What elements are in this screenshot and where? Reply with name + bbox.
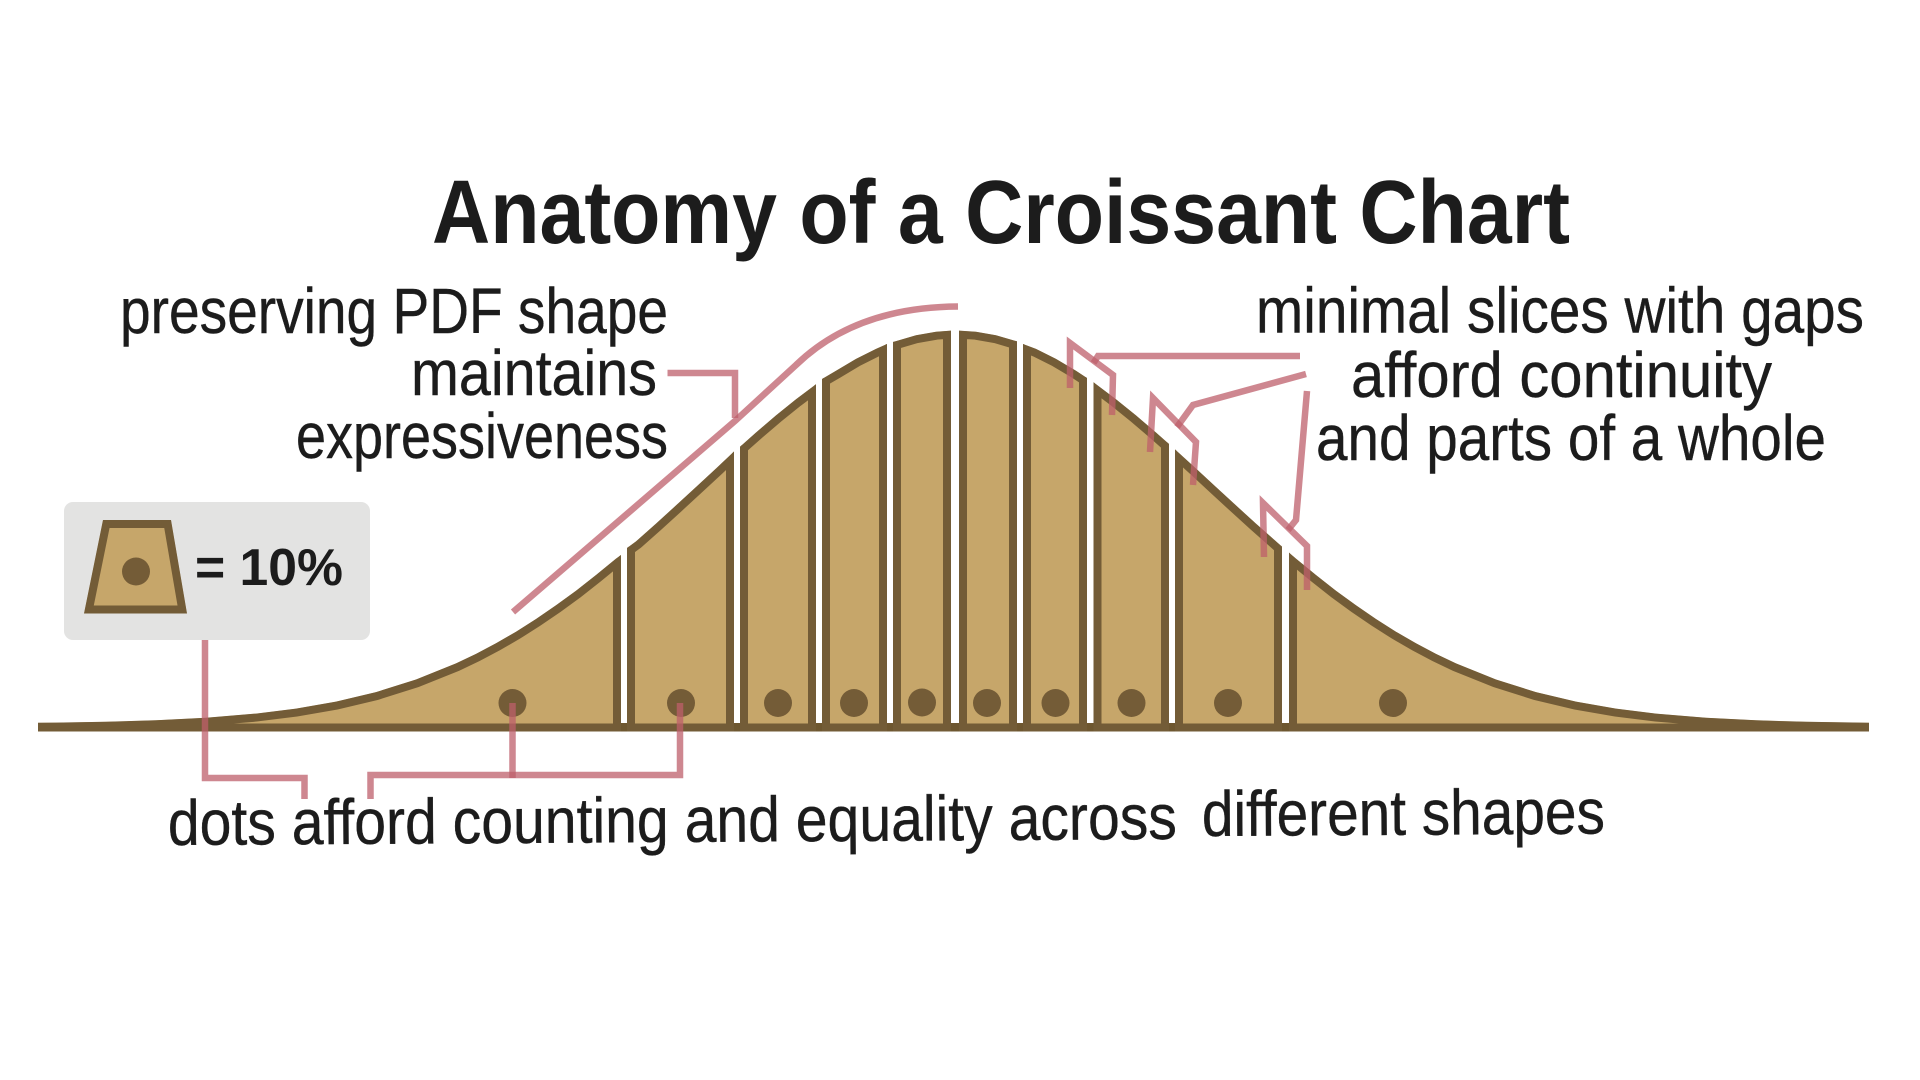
slice 1 bbox=[38, 555, 621, 732]
slice 9 bbox=[1175, 449, 1282, 732]
annotation text: dots afford counting: dots afford counting and equality across bbox=[168, 781, 1177, 859]
slice 6 bbox=[959, 331, 1017, 732]
legend value: = 10% bbox=[195, 539, 343, 597]
annotation text: preserving PDF shape bbox=[120, 275, 668, 472]
callout: gap bracket 2 bbox=[1150, 374, 1306, 485]
slice 2 bbox=[627, 452, 734, 732]
annotation text: minimal slices with gaps: and parts of a whole bbox=[1316, 402, 1826, 474]
annotation text: preserving PDF shape: maintains bbox=[411, 337, 657, 409]
croissant chart bbox=[38, 331, 1869, 732]
annotation text: minimal slices with gaps bbox=[1256, 274, 1864, 474]
annotation text: preserving PDF shape: preserving PDF shape bbox=[120, 275, 668, 347]
slice 3 bbox=[740, 384, 816, 732]
baseline bbox=[38, 723, 1869, 732]
slice 5 bbox=[893, 331, 951, 732]
slice 7 bbox=[1023, 344, 1087, 732]
legend icon: trapezoid slice with dot bbox=[84, 520, 187, 614]
legend panel bbox=[64, 502, 370, 640]
annotation text: dots afford counting: different shapes bbox=[1202, 776, 1605, 850]
callout: gap bracket 1 bbox=[1070, 343, 1300, 415]
annotation text: preserving PDF shape: expressiveness bbox=[296, 400, 668, 472]
annotation text: minimal slices with gaps: afford continuity bbox=[1351, 339, 1772, 411]
slice 4 bbox=[822, 344, 887, 732]
title: Anatomy of a Croissant Chart bbox=[432, 163, 1570, 263]
slice 8 bbox=[1094, 382, 1169, 732]
legend bbox=[64, 502, 370, 640]
callout: gap bracket 3 bbox=[1263, 391, 1307, 590]
callout: PDF shape curve leader bbox=[513, 306, 958, 612]
slice 10 bbox=[1289, 553, 1869, 732]
callout: dots leader bbox=[370, 703, 680, 799]
callout: legend leader bbox=[205, 640, 304, 799]
